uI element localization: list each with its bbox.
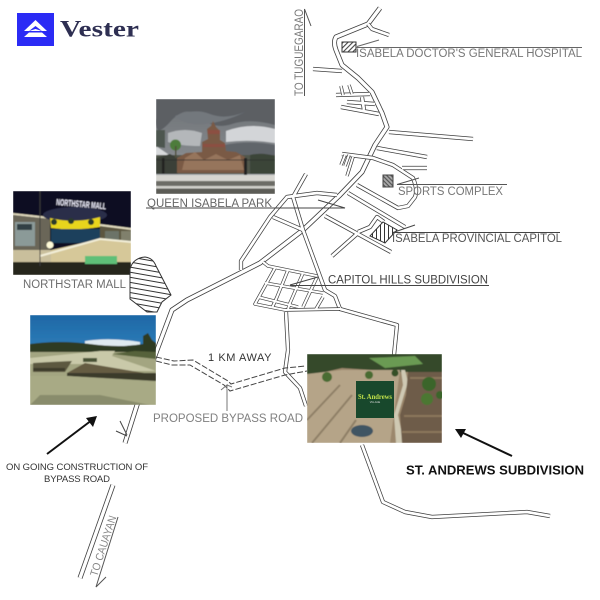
arrow: to Cauayan: TO CAUAYAN — [88, 514, 119, 578]
label: Isabela Provincial Capitol — [370, 222, 563, 245]
caption: on going construction: ON GOING CONSTRUCTION OF — [6, 462, 148, 473]
label: St. Andrews Subdivision: ST. ANDREWS SUBDIVISION — [406, 464, 584, 478]
label: Sports Complex: SPORTS COMPLEX — [398, 186, 503, 198]
label: proposed bypass road — [153, 385, 303, 425]
logo wordmark: Vester — [60, 16, 139, 42]
label: Northstar Mall: NORTHSTAR MALL — [23, 279, 127, 291]
road ticks: bypass junction — [116, 421, 127, 436]
map marker: hospital — [342, 42, 356, 52]
map marker: capitol — [370, 222, 397, 243]
map marker: sports complex — [383, 175, 393, 187]
logo: Vester — [17, 13, 139, 46]
arrow: to construction photo — [47, 416, 97, 454]
label: proposed bypass road: PROPOSED BYPASS ROAD — [153, 413, 303, 425]
icon: logo mark — [17, 13, 54, 46]
label: Sports Complex — [383, 175, 507, 198]
arrow: to Tuguegarao — [292, 9, 311, 96]
photo: Queen Isabela Park — [156, 99, 275, 194]
label: Isabela Provincial Capitol: ISABELA PROVINCIAL CAPITOL — [392, 233, 563, 245]
label: 1 km away: 1 KM AWAY — [208, 352, 272, 364]
St. Andrews sign — [356, 381, 394, 418]
photo: Northstar Mall: NORTHSTAR MALL — [56, 197, 107, 211]
label: Queen Isabela Park: QUEEN ISABELA PARK — [147, 198, 272, 210]
proposed bypass road dashed line — [156, 357, 307, 391]
aerial view — [307, 354, 444, 443]
photo: on going bypass road construction — [30, 315, 156, 405]
label: Capitol Hills Subdivision: CAPITOL HILLS SUBDIVISION — [328, 274, 488, 286]
photo: St. Andrews site with sign — [307, 354, 444, 443]
caption: on going construction: BYPASS ROAD — [44, 474, 110, 485]
caption: on going construction — [6, 462, 148, 485]
label: Queen Isabela Park — [146, 198, 345, 210]
photo: Northstar Mall — [13, 191, 131, 275]
St. Andrews sign: St. Andrews — [358, 393, 392, 401]
St. Andrews sign: VILLAGE — [370, 401, 381, 404]
label: Isabela Doctor's General Hospital: ISABELA DOCTOR'S GENERAL HOSPITAL — [356, 48, 583, 60]
road network — [80, 8, 550, 578]
arrow: to St. Andrews photo — [455, 429, 512, 456]
map marker: hatched Northstar Mall block — [130, 257, 171, 312]
label: Isabela Doctor's General Hospital — [342, 40, 583, 60]
